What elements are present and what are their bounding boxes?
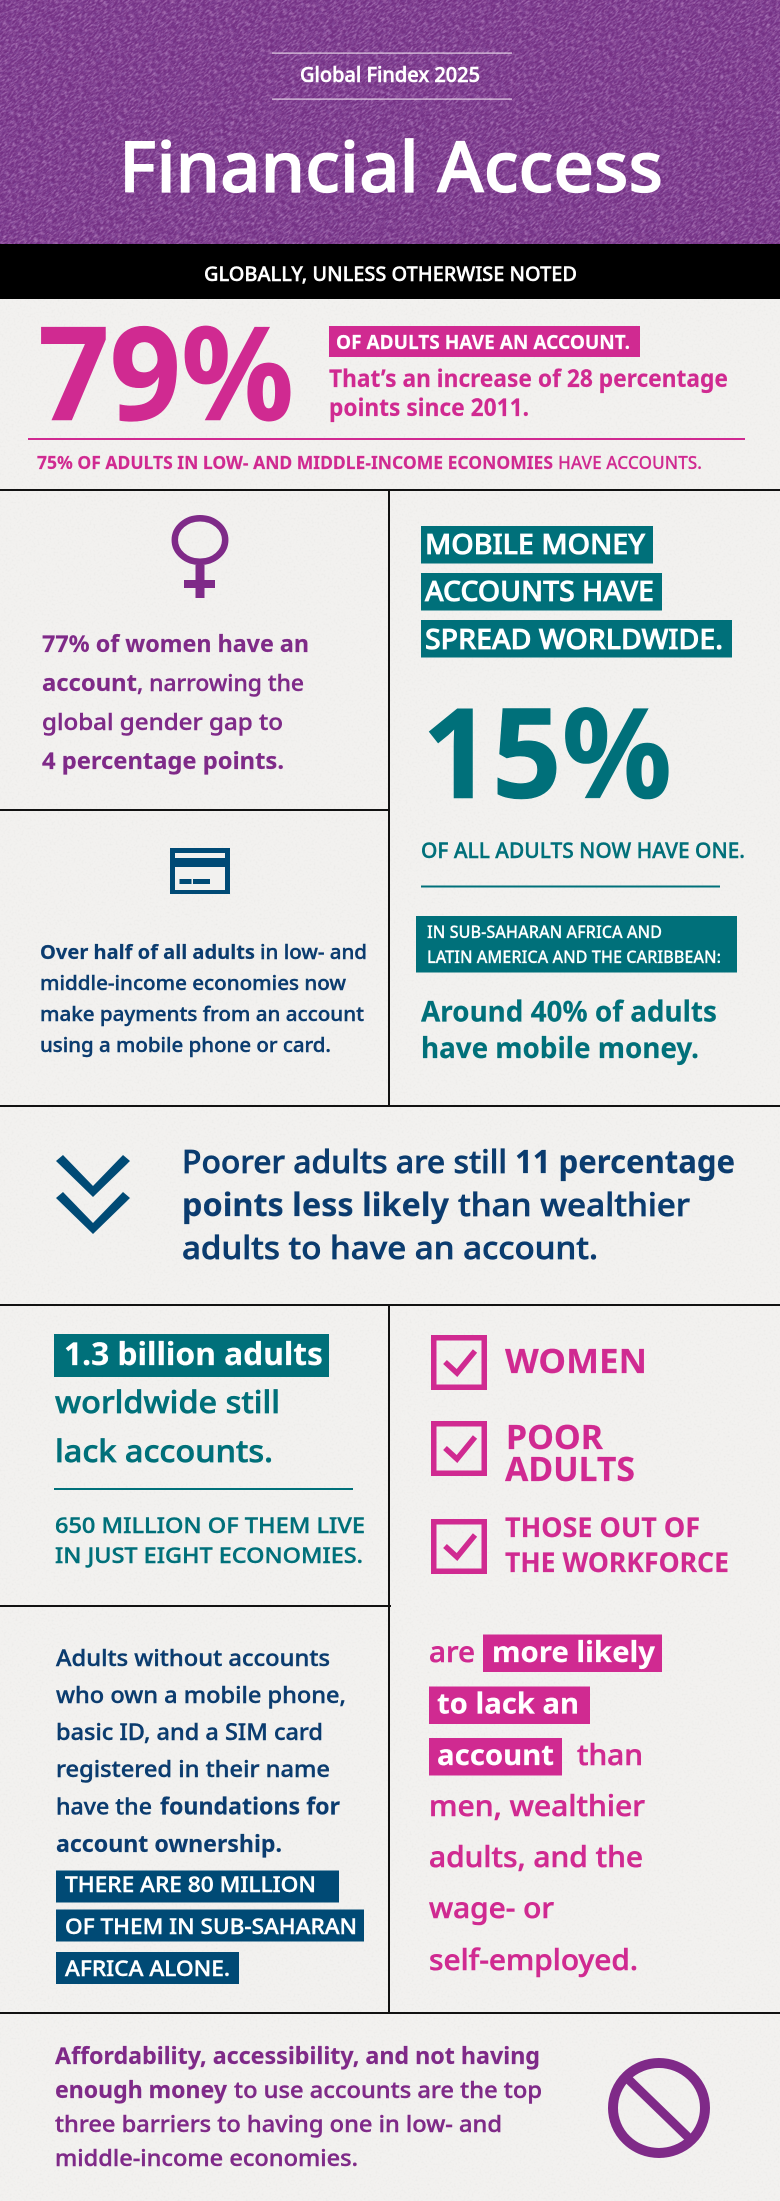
- women text: global gender gap to: [42, 705, 283, 737]
- title: Financial Access: [119, 117, 663, 213]
- panel: more likely: than: [577, 1735, 643, 1774]
- eight economies text: 650 MILLION OF THEM LIVE: [55, 1510, 365, 1540]
- regional label: LATIN AMERICA AND THE CARIBBEAN:: [427, 945, 721, 968]
- icon: prohibition sign: [613, 2063, 705, 2153]
- sub-saharan callout: [56, 1869, 364, 1984]
- low and middle income note: HAVE ACCOUNTS.: [558, 451, 702, 475]
- foundations text: [56, 1641, 346, 1859]
- regional label: [416, 916, 737, 972]
- payments text: using a mobile phone or card.: [40, 1031, 331, 1058]
- foundations text: basic ID, and a SIM card: [56, 1715, 323, 1747]
- barriers text: [55, 2039, 542, 2173]
- panel: foundations: [56, 1641, 364, 1984]
- regional label: IN SUB-SAHARAN AFRICA AND: [427, 920, 662, 943]
- payments text: in low- and: [260, 938, 367, 965]
- all adults caption: OF ALL ADULTS NOW HAVE ONE.: [421, 835, 745, 865]
- icon: checkbox poor adults: [434, 1424, 484, 1473]
- panel: more likely: men, wealthier: [429, 1786, 645, 1825]
- foundations text: registered in their name: [56, 1752, 330, 1784]
- payments text: [40, 938, 367, 1058]
- header banner: [0, 0, 780, 244]
- barriers text: to use accounts are the top: [234, 2073, 542, 2105]
- women text: account: [42, 666, 137, 698]
- mobile money heading: SPREAD WORLDWIDE.: [425, 620, 723, 658]
- barriers text: Affordability, accessibility, and not having: [55, 2039, 540, 2071]
- foundations text: have the: [56, 1790, 152, 1822]
- lack accounts text: lack accounts.: [55, 1430, 273, 1472]
- payments text: make payments from an account: [40, 1000, 364, 1027]
- increase text: [329, 362, 728, 424]
- panel: payments: [40, 848, 367, 1058]
- label workforce: [505, 1508, 729, 1580]
- panel: more likely: to lack an: [437, 1684, 579, 1722]
- mobile money heading: ACCOUNTS HAVE: [425, 572, 654, 610]
- panel: more likely: more likely: [492, 1632, 655, 1671]
- icon: checkbox women: [434, 1338, 484, 1387]
- women text: , narrowing the: [137, 666, 304, 698]
- label poor adults: ADULTS: [505, 1446, 635, 1491]
- barriers text: middle-income economies.: [55, 2141, 358, 2173]
- panel: more likely: adults, and the: [429, 1837, 643, 1876]
- panel: barriers: [55, 2039, 705, 2173]
- foundations text: who own a mobile phone,: [56, 1678, 346, 1710]
- foundations text: foundations for: [160, 1790, 340, 1822]
- big number 15%: 15%: [422, 664, 672, 835]
- barriers text: three barriers to having one in low- and: [55, 2107, 502, 2139]
- regional figure: have mobile money.: [421, 1028, 699, 1067]
- panel: income gap: [56, 1140, 735, 1269]
- income gap text: [182, 1140, 735, 1269]
- panel: more likely: are: [429, 1632, 475, 1671]
- panel: women: [42, 518, 309, 776]
- women text: 77% of women have an: [42, 627, 309, 659]
- eight economies text: IN JUST EIGHT ECONOMIES.: [55, 1540, 363, 1570]
- big number 79%: 79%: [38, 282, 294, 459]
- icon: payment card: [170, 848, 230, 894]
- income gap text: than wealthier: [458, 1183, 690, 1226]
- label poor adults: POOR: [506, 1414, 603, 1459]
- payments text: Over half of all adults: [40, 938, 255, 965]
- income gap text: points less likely: [182, 1183, 450, 1226]
- income gap text: Poorer adults are still: [182, 1140, 507, 1183]
- panel: unbanked adults: [54, 1333, 365, 1570]
- eight economies text: [55, 1510, 365, 1570]
- icon: double chevron: [56, 1155, 130, 1234]
- lack accounts text: worldwide still: [55, 1381, 280, 1423]
- panel: more likely: [429, 1632, 662, 1979]
- label women: WOMEN: [505, 1338, 647, 1383]
- panel: who lacks accounts: [434, 1338, 729, 1580]
- label workforce: THE WORKFORCE: [505, 1543, 729, 1580]
- sub-saharan callout: OF THEM IN SUB-SAHARAN: [65, 1911, 357, 1941]
- low and middle income note: 75% OF ADULTS IN LOW- AND MIDDLE-INCOME ECONOMIES: [37, 451, 553, 475]
- label poor adults: [505, 1414, 635, 1491]
- income gap text: adults to have an account.: [182, 1226, 598, 1269]
- pink label: OF ADULTS HAVE AN ACCOUNT.: [336, 328, 630, 355]
- lack accounts text: [55, 1381, 280, 1472]
- regional figure: [421, 992, 717, 1067]
- payments text: middle-income economies now: [40, 969, 346, 996]
- black scope bar: [0, 244, 780, 299]
- women text: 4 percentage points.: [42, 744, 284, 776]
- icon: female symbol: [175, 518, 225, 598]
- sub-saharan callout: AFRICA ALONE.: [65, 1953, 230, 1983]
- panel: 79 percent: [28, 282, 745, 475]
- panel: more likely: wage- or: [429, 1888, 554, 1927]
- sub-saharan callout: THERE ARE 80 MILLION: [65, 1869, 316, 1899]
- 1.3 billion label: 1.3 billion adults: [64, 1333, 323, 1375]
- panel: more likely: self-employed.: [429, 1940, 638, 1979]
- label workforce: THOSE OUT OF: [505, 1508, 700, 1545]
- foundations text: Adults without accounts: [56, 1641, 330, 1673]
- barriers text: enough money: [55, 2073, 228, 2105]
- panel: more likely: account: [437, 1735, 554, 1774]
- increase text: points since 2011.: [329, 391, 529, 424]
- mobile money heading: [421, 525, 732, 658]
- black scope bar: GLOBALLY, UNLESS OTHERWISE NOTED: [204, 260, 577, 287]
- women text: [42, 627, 309, 776]
- subtitle: Global Findex 2025: [300, 61, 480, 89]
- regional figure: Around 40% of adults: [421, 992, 717, 1030]
- increase text: That’s an increase of 28 percentage: [329, 362, 728, 395]
- mobile money heading: MOBILE MONEY: [425, 525, 646, 563]
- panel: mobile money: [416, 525, 745, 1067]
- foundations text: account ownership.: [56, 1827, 282, 1859]
- icon: checkbox workforce: [434, 1522, 484, 1571]
- income gap text: 11 percentage: [515, 1140, 735, 1183]
